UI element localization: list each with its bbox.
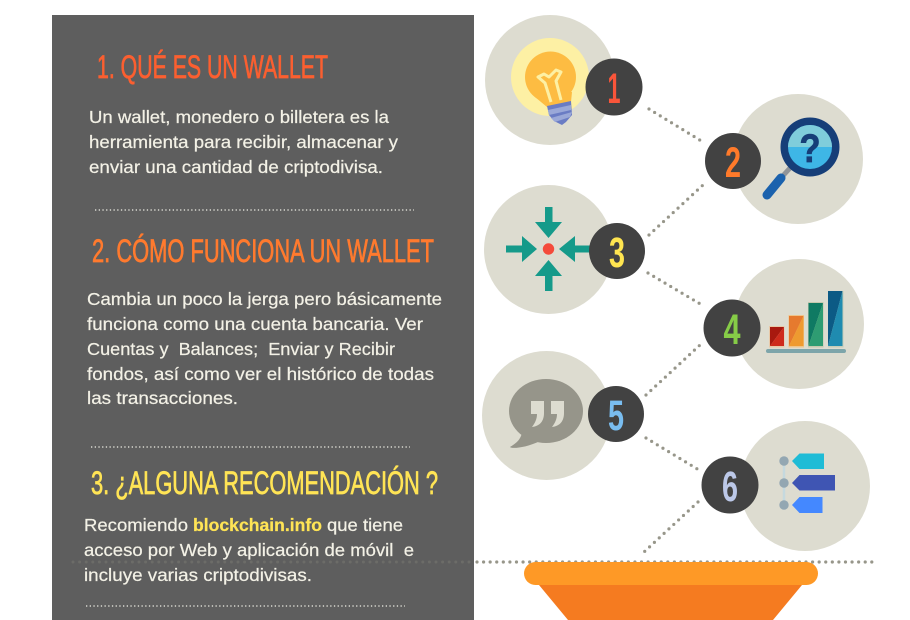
badge 3: 3 — [609, 229, 625, 277]
step 4: bar chart — [704, 259, 864, 389]
icon: magnifying glass — [767, 118, 840, 195]
step 6: list tags — [702, 421, 870, 551]
text block 3: que tiene — [327, 515, 403, 535]
badge 2 — [705, 133, 761, 189]
badge 4 — [704, 300, 760, 356]
dotted connector lines — [73, 109, 874, 562]
badge 5 — [588, 386, 644, 442]
text block 1: Un wallet, monedero o billetera es la — [89, 107, 389, 127]
badge 1: 1 — [608, 65, 620, 113]
text block 3: blockchain.info — [193, 515, 322, 535]
text block 3: acceso por Web y aplicación de móvil e — [84, 540, 414, 560]
icon: converging arrows — [506, 207, 592, 291]
text block 2 — [87, 289, 442, 408]
step 1: light bulb — [485, 15, 642, 145]
step 3: arrows — [484, 185, 645, 314]
text block 1: enviar una cantidad de criptodivisa. — [89, 157, 383, 177]
badge 3 — [589, 223, 645, 279]
bar chart icon — [766, 291, 846, 353]
icon: magnifying glass: ? — [800, 127, 820, 171]
icon: light bulb — [511, 38, 589, 125]
badge 2: 2 — [725, 139, 741, 187]
panel: text column — [52, 15, 474, 620]
badge 5: 5 — [608, 392, 624, 440]
icon: tag list — [779, 454, 835, 513]
text block 2: funciona como una cuenta bancaria. Ver — [87, 314, 423, 334]
badge 1 — [586, 58, 642, 116]
icon: speech bubble with quotes — [509, 379, 583, 448]
step 2: magnifier — [705, 94, 863, 224]
text block 2: las transacciones. — [87, 388, 238, 408]
heading 1: 1. QUÉ ES UN WALLET — [97, 49, 328, 85]
badge 4: 4 — [724, 306, 741, 354]
heading 3: 3. ¿ALGUNA RECOMENDACIÓN ? — [91, 465, 438, 501]
funnel — [524, 562, 818, 620]
text block 3 — [84, 515, 414, 585]
heading 2: 2. CÓMO FUNCIONA UN WALLET — [92, 233, 434, 269]
text block 3: Recomiendo — [84, 515, 188, 535]
text block 3: incluye varias criptodivisas. — [84, 565, 312, 585]
text block 2: Cambia un poco la jerga pero básicamente — [87, 289, 442, 309]
text block 1: herramienta para recibir, almacenar y — [89, 132, 398, 152]
step 5: speech bubble — [482, 351, 644, 480]
badge 6: 6 — [722, 463, 738, 511]
text block 1 — [89, 107, 398, 177]
badge 6 — [702, 456, 758, 514]
text block 2: Cuentas y Balances; Enviar y Recibir — [87, 339, 395, 359]
text block 2: fondos, así como ver el histórico de todas — [87, 364, 434, 384]
